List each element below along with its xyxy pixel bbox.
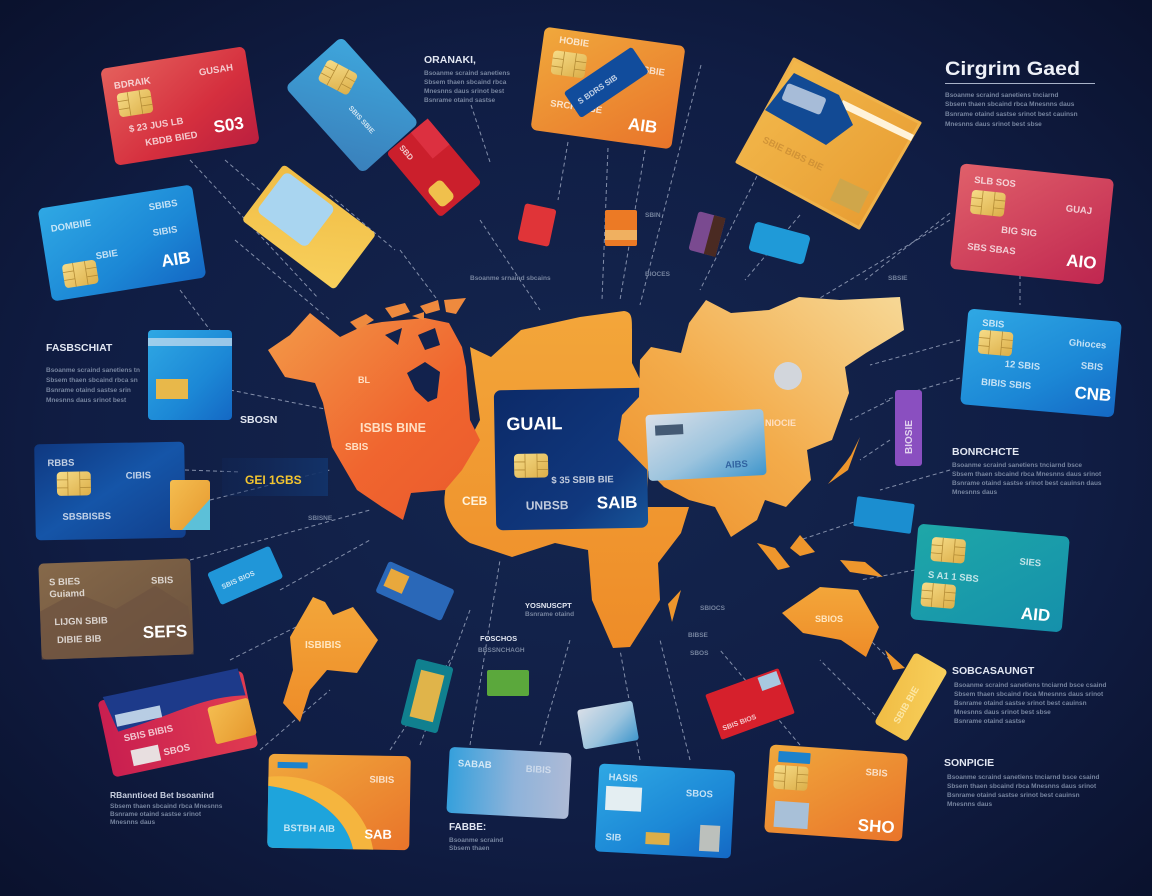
text block: right lower: Bsnrame otaind sastse srinot best cauinsn (954, 700, 1087, 707)
card: light centre (645, 409, 767, 481)
connector lines (180, 65, 1020, 760)
text block: top right (945, 92, 1078, 128)
card: main navy: GUAIL (506, 413, 563, 434)
card: orange top: SBIE (642, 65, 666, 79)
text block: bottom right: SONPICIE (944, 757, 994, 769)
card: navy left (34, 442, 186, 540)
card: red right: GUAJ (1065, 203, 1093, 217)
card: navy left: SBSBISBS (62, 511, 111, 523)
card: red top left: $ 23 JUS LB (128, 116, 184, 135)
card: blue top (285, 36, 419, 174)
text block: bottom left: RBanntioed Bet bsoanind (110, 790, 214, 800)
card: small blue right (853, 496, 915, 534)
card: orange top: HOBIE (558, 35, 590, 50)
card: small blue centre (375, 561, 455, 621)
text block: right middle (952, 446, 1102, 496)
card: red top left: GUSAH (198, 62, 234, 79)
card: navy left: RBBS (47, 458, 75, 469)
text block: top right: Mnesnns daus srinot best sbse (945, 121, 1042, 128)
card: red right: AIO (1065, 251, 1097, 273)
map labels: GEI 1GBS (245, 473, 302, 487)
card: blue bottom: SIB (605, 832, 622, 844)
card: brown left (38, 558, 194, 660)
text block: right middle: Mnesnns daus (952, 489, 998, 496)
card: brown left: DIBIE BIB (57, 634, 102, 646)
card: red right: BIG SIG (1001, 225, 1037, 240)
text block: left: FASBSCHIAT (46, 342, 113, 354)
card: gold small right (874, 652, 948, 742)
card: red small bottom (705, 668, 795, 740)
card: orange bottom right (764, 744, 908, 842)
text block: top centre: Sbsem thaen sbcaind rbca (424, 79, 507, 86)
card: orange bottom right: SHO (857, 816, 895, 837)
map labels: SBIS (345, 442, 369, 453)
card: red small: SBD (397, 143, 415, 162)
card: red right (950, 163, 1114, 285)
globe marker (774, 362, 802, 390)
small labels: BIBSE (688, 632, 709, 639)
card: light blue bottom: SABAB (458, 758, 492, 771)
card: small purple top (688, 211, 726, 257)
text block: left: Bsoanme scraind sanetiens tn (46, 367, 140, 374)
small labels: Bsnrame otaind (525, 611, 574, 618)
card: blue top left: DOMBIIE (50, 218, 92, 235)
text block: bottom centre: Bsoanme scraind (449, 837, 503, 844)
card: navy overlay: S BDRS SIB (576, 73, 619, 106)
map labels: ISBIS BINE (360, 421, 426, 435)
text block: bottom centre: Sbsem thaen (449, 845, 489, 852)
card: blue bottom (595, 764, 735, 858)
card: small red top (517, 203, 557, 247)
text block: top centre: Mnesnns daus srinot best (424, 88, 505, 95)
map labels: ISBIBIS (305, 640, 341, 651)
card: brown left: SBIS (151, 575, 173, 587)
map: Australia (782, 587, 879, 657)
card: blue right: BIBIS SBIS (981, 377, 1032, 392)
card: red top left: S03 (212, 113, 245, 137)
card: red top left: KBDB BIED (145, 130, 199, 149)
text block: top centre: Bsnrame otaind sastse (424, 97, 496, 104)
text block: bottom left: Mnesnns daus (110, 819, 156, 826)
title: Cirgrim Gaed (945, 59, 1080, 80)
small labels: FOSCHOS (480, 634, 517, 643)
map: North America (268, 313, 480, 520)
text block: bottom right: Bsnrame otaind sastse srinot best cauinsn (947, 792, 1080, 799)
text block: right lower (952, 665, 1106, 725)
small labels: SBOS (690, 650, 709, 657)
card: blue top left: SBIBS (148, 198, 178, 213)
text block: right lower: SOBCASAUNGT (952, 665, 1035, 677)
card: blue right (960, 308, 1122, 418)
text block: left: Sbsem thaen sbcaind rbca sn (46, 377, 138, 384)
text block: left (46, 342, 140, 404)
card: gold right: SBIE BIBS BIE (761, 135, 825, 174)
map: Asia (618, 297, 904, 537)
card: blue right: CNB (1074, 383, 1112, 405)
card: small blue left: SBIS BIOS (221, 570, 256, 591)
card: light blue bottom: BIBIS (525, 764, 551, 776)
small labels: BBSSNCHAGH (478, 647, 525, 654)
small labels: BIOCES (645, 271, 671, 278)
small labels: SBIN (645, 212, 661, 219)
card: small blue top (748, 221, 811, 265)
card: gold right (737, 59, 920, 228)
text block: bottom right: Bsoanme scraind sanetiens tnciarnd bsce csaind (947, 774, 1099, 781)
card: blue right: Ghioces (1068, 337, 1107, 352)
card: light blue bottom (446, 747, 572, 819)
text block: top right: Bsnrame otaind sastse srinot best cauinsn (945, 111, 1078, 118)
card: gold small right: SBIB BIE (892, 685, 922, 726)
GEI label band (222, 458, 328, 496)
card: orange top (530, 27, 686, 149)
text block: bottom centre (449, 822, 503, 852)
text block: right lower: Mnesnns daus srinot best sbse (954, 709, 1051, 716)
card: blue right: SBIS (1080, 361, 1103, 373)
card: main navy: UNBSB (526, 498, 569, 513)
card: light centre: AIBS (725, 459, 748, 471)
map: Hudson Bay cut-out (385, 328, 440, 402)
small labels (308, 212, 908, 657)
text block: top centre (424, 54, 510, 104)
text block: bottom centre: FABBE: (449, 822, 486, 833)
card: red small bottom: SBIS BIOS (722, 714, 758, 733)
small labels: Bsoanme srnaind sbcains (470, 275, 551, 282)
card: blue top left: SBIE (95, 248, 119, 262)
text block: left: Bsnrame otaind sastse srin (46, 387, 131, 394)
card: blue top: SBIS SBIE (347, 105, 375, 136)
text block: right middle: Bsoanme scraind sanetiens tnciarnd bsce (952, 462, 1082, 469)
small labels: SBIOCS (700, 605, 726, 612)
card: crimson left (97, 668, 258, 778)
card: orange top: AIB (627, 114, 659, 137)
card: blue right: SBIS (982, 318, 1005, 331)
card: red small (386, 118, 482, 218)
card: red right: SLB SOS (974, 175, 1016, 190)
text block: right middle: BONRCHCTE (952, 446, 1019, 458)
card: blue top left: SIBIS (152, 224, 178, 239)
card: brown left: S BIES (49, 576, 80, 588)
text block: bottom right: Sbsem thaen sbcaind rbca Mnesnns daus srinot (947, 783, 1097, 790)
card: green (487, 670, 529, 696)
card: navy overlay right (765, 73, 853, 145)
map labels: SBIOS (815, 614, 843, 624)
text block: bottom left (110, 790, 223, 826)
text block: top right: Bsoanme scraind sanetiens tnciarnd (945, 92, 1058, 99)
card: blue top left (38, 184, 206, 302)
map labels (240, 375, 843, 651)
card: light small (577, 700, 639, 750)
card: main navy: SAIB (597, 493, 638, 513)
card: teal right (910, 524, 1070, 632)
card: small orange top (605, 210, 637, 246)
card: brown left: Guiamd (49, 588, 85, 600)
map labels: BL (358, 375, 370, 385)
card: blue bottom: HASIS (608, 772, 638, 785)
card: brown left: LIJGN SBIB (54, 615, 108, 628)
card: navy left: CIBIS (126, 470, 151, 482)
map labels: SBOSN (240, 414, 277, 426)
card: orange blue bottom: BSTBH AIB (283, 823, 335, 835)
card: teal right: S A1 1 SBS (928, 570, 979, 585)
card: orange bottom right: SBIS (865, 767, 888, 780)
small labels: SBSIE (888, 275, 908, 282)
card: small gold left (170, 480, 210, 530)
text block: right middle: Bsnrame otaind sastse srinot best cauinsn daus (952, 480, 1102, 487)
card: blue right: 12 SBIS (1004, 359, 1040, 373)
map labels: NIOCIE (765, 418, 796, 428)
text block: top centre: ORANAKI, (424, 54, 476, 66)
card: orange blue bottom: SAB (364, 826, 392, 842)
text block: bottom right: Mnesnns daus (947, 801, 993, 808)
card: red right: SBS SBAS (967, 241, 1016, 257)
card: brown left: SEFS (143, 622, 188, 642)
card: red top left: BDRAIK (113, 75, 152, 92)
text block: right lower: Bsoanme scraind sanetiens tnciarnd bsce csaind (954, 682, 1106, 689)
map: central landmass and Africa (444, 311, 689, 648)
card: main navy (494, 388, 648, 530)
card: orange blue bottom: SIBIS (369, 775, 394, 786)
card: teal right: AID (1020, 604, 1051, 625)
map: South America (283, 597, 378, 722)
text block: bottom left: Bsnrame otaind sastse srinot (110, 811, 202, 818)
card: navy overlay (564, 47, 649, 118)
card: purple strip: BIOSIE (904, 420, 915, 454)
text block: right lower: Bsnrame otaind sastse (954, 718, 1026, 725)
small labels: YOSNUSCPT (525, 601, 572, 610)
text block: left: Mnesnns daus srinot best (46, 397, 127, 404)
card: gold overlay (207, 697, 257, 745)
map labels: CEB (462, 494, 488, 508)
card: blue top left: AIB (160, 248, 192, 271)
card: orange blue bottom (267, 754, 411, 850)
card: gold blue (242, 164, 376, 290)
text block: bottom left: Sbsem thaen sbcaind rbca Mnesnns (110, 803, 223, 810)
map: Canadian islands (350, 298, 466, 330)
card: crimson left: SBOS (163, 742, 191, 758)
card: teal sim (400, 658, 454, 734)
text block: top right: Sbsem thaen sbcaind rbca Mnesnns daus (945, 101, 1075, 108)
card: main navy: $ 35 SBIB BIE (551, 474, 614, 486)
text block: right lower: Sbsem thaen sbcaind rbca Mnesnns daus srinot (954, 691, 1104, 698)
text block: top centre: Bsoanme scraind sanetiens (424, 70, 510, 77)
card: small blue left (207, 546, 283, 605)
text block: right middle: Sbsem thaen sbcaind rbca Mnesnns daus srinot (952, 471, 1102, 478)
text block: bottom right (944, 757, 1099, 808)
card: blue bottom: SBOS (686, 788, 713, 800)
card: red top left (100, 46, 260, 166)
card: crimson left: SBIS BIBIS (123, 723, 174, 744)
small labels: SBISNE (308, 515, 333, 522)
card: blue left (148, 330, 232, 420)
card: teal right: SIES (1019, 557, 1042, 569)
card: purple strip (895, 390, 922, 466)
map: islands (668, 437, 905, 670)
card: orange top: SRCH BIBE (549, 98, 603, 116)
